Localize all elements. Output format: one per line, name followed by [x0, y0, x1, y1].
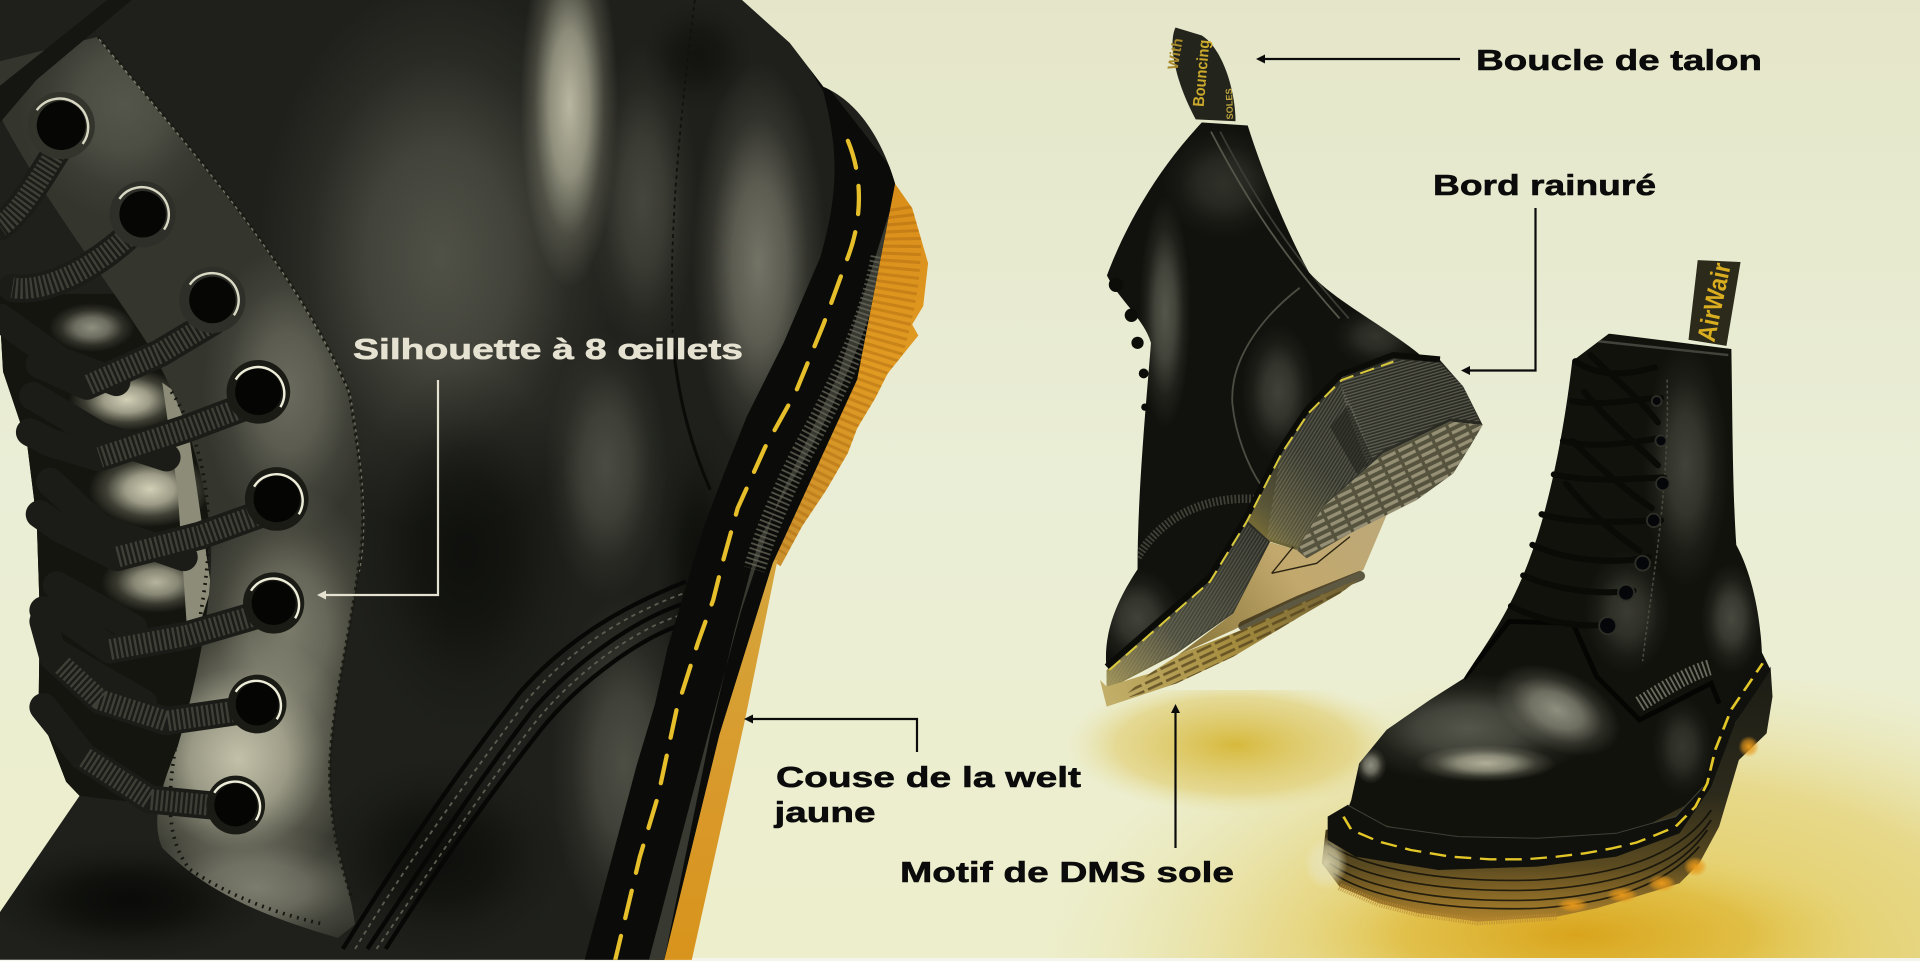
forepart tread — [1100, 579, 1360, 707]
yellow sole strip — [655, 560, 777, 960]
grooved sole — [1100, 355, 1483, 707]
eyelets — [28, 92, 309, 834]
heel loop: With — [1166, 37, 1187, 71]
dark lace bodies — [0, 144, 270, 807]
label: Boucle de talon: Boucle de talon — [1476, 45, 1762, 77]
heel loop: Bouncing — [1191, 39, 1214, 107]
pale tongue gaps — [0, 294, 211, 912]
label: Couse de la welt jaune: Couse de la welt — [776, 762, 1081, 794]
label: Boucle de talon — [1256, 45, 1762, 77]
orange translucent ribbed sole — [774, 184, 928, 566]
yellow welt stitching — [615, 141, 859, 960]
heel loop — [1166, 28, 1235, 121]
boot body — [0, 0, 960, 960]
standing boot — [1304, 260, 1780, 922]
side ribs — [1107, 357, 1483, 690]
label: Bord rainuré — [1433, 170, 1656, 375]
floating boot — [1095, 28, 1483, 707]
pull tab: AirWair — [1693, 260, 1737, 344]
label: Motif de DMS sole: Motif de DMS sole — [900, 857, 1234, 889]
flap and V seam — [1464, 621, 1719, 720]
label: Couse de la welt jaune — [744, 714, 1081, 829]
welt stitching — [1109, 362, 1393, 670]
label: Silhouette à 8 œillets: Silhouette à 8 œillets — [353, 334, 743, 366]
standing boot eyelets — [1599, 396, 1670, 634]
heel tread — [1297, 422, 1483, 558]
lace weave highlights — [0, 144, 270, 807]
floating boot lace tips — [1109, 277, 1149, 411]
welt — [1107, 355, 1440, 667]
upper left lace band — [0, 0, 132, 122]
vamp seam triple stitching — [343, 582, 686, 949]
laces — [0, 144, 270, 807]
ribbed sole — [1304, 667, 1773, 922]
sole logo — [1272, 537, 1350, 573]
close-up boot image — [0, 0, 960, 960]
standing boot upper — [1349, 334, 1762, 838]
label: Bord rainuré: Bord rainuré — [1433, 170, 1656, 202]
eyelet panel — [0, 37, 362, 938]
label: Silhouette à 8 œillets — [317, 334, 743, 600]
boot upper — [1106, 122, 1420, 666]
tan translucent midsole — [1178, 515, 1387, 655]
welt band — [585, 46, 906, 960]
heel loop: SOLES — [1224, 88, 1235, 120]
welt band and stitching — [1328, 650, 1771, 870]
label: Couse de la welt jaune: jaune — [773, 797, 876, 829]
label: Motif de DMS sole — [900, 704, 1234, 889]
standing boot laces — [1511, 355, 1664, 625]
dark sole recess — [1243, 576, 1360, 626]
stitching on panel — [98, 37, 363, 900]
